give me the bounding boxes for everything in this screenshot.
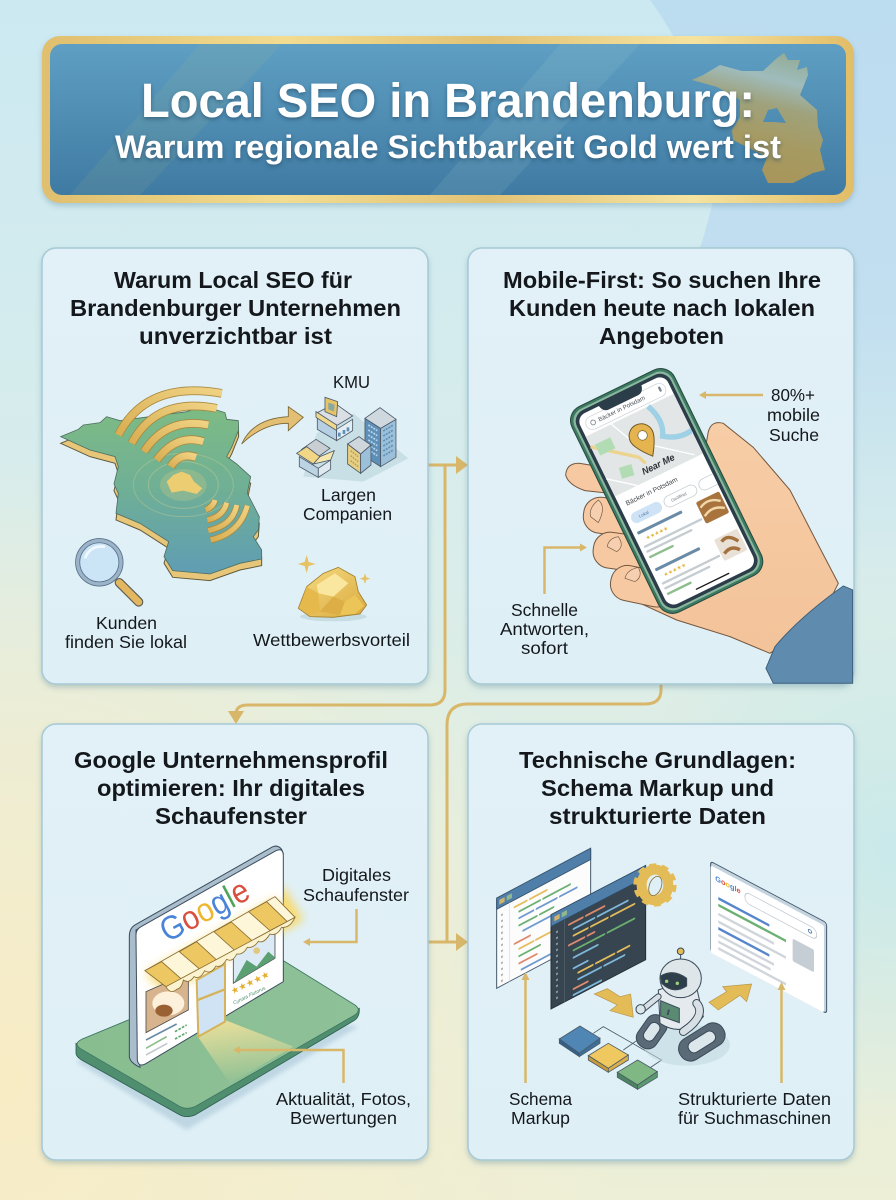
landscape picture	[233, 923, 275, 983]
hand and sleeve	[566, 423, 853, 683]
icon: Brandenburg map with signal waves	[61, 391, 262, 581]
market stall	[297, 439, 334, 477]
dark code window	[551, 865, 646, 1009]
phone	[565, 363, 768, 619]
title text: Warum regionale Sichtbarkeit Gold wert ist	[115, 129, 781, 165]
shop with sign	[316, 397, 353, 441]
robot	[632, 948, 730, 1066]
callout: 80% mobile search: Suche	[769, 425, 819, 445]
callout: digital storefront: Schaufenster	[303, 885, 409, 905]
awning	[145, 897, 295, 992]
filter chips: Geöffnet	[670, 491, 688, 503]
filter chips: Lokal	[638, 510, 650, 519]
heading	[70, 267, 401, 349]
phone screen	[576, 374, 757, 608]
result list 2	[655, 528, 750, 595]
arms	[644, 997, 658, 1008]
results browser	[711, 861, 827, 1014]
icon: Brandenburg map silhouette	[692, 53, 825, 183]
heading: Kunden heute nach lokalen	[509, 295, 815, 321]
icon: magnifying glass	[78, 541, 139, 602]
pin	[625, 420, 662, 462]
star rating: Cynara Flutorus	[232, 985, 267, 1006]
label: Largen Companien: Largen	[321, 485, 376, 505]
green platform	[76, 959, 359, 1117]
panel: Technische Grundlagen	[468, 724, 854, 1160]
map surface	[61, 408, 262, 574]
schema diagram blocks	[559, 1026, 662, 1089]
heading: Warum Local SEO für	[114, 267, 352, 293]
photo	[146, 973, 188, 1033]
sleeve	[766, 586, 853, 683]
illustration: code, robot and search results	[497, 848, 827, 1089]
gold arrows	[594, 984, 752, 1017]
yellow building	[348, 437, 371, 473]
callout: structured data	[678, 982, 831, 1128]
heading: strukturierte Daten	[549, 803, 766, 829]
flow connectors	[228, 456, 661, 951]
signal arcs	[118, 391, 247, 540]
callout: structured data: für Suchmaschinen	[678, 1108, 831, 1128]
finger nails	[590, 500, 640, 582]
callout: currency, photos, reviews: Bewertungen	[290, 1108, 397, 1128]
heading: Angeboten	[599, 323, 724, 349]
callout: 80% mobile search: mobile	[767, 405, 820, 425]
home bar	[695, 572, 730, 590]
plate shadow	[76, 1000, 358, 1130]
results browser: Google	[715, 874, 741, 896]
label: Largen Companien	[303, 485, 392, 524]
label: Kunden finden Sie lokal: Kunden	[96, 613, 157, 633]
palm	[637, 423, 838, 653]
heading: Technische Grundlagen:	[519, 747, 796, 773]
callout: schema markup: Markup	[511, 1108, 570, 1128]
icon: small businesses	[297, 397, 408, 482]
light code window	[497, 848, 591, 988]
antenna	[679, 954, 682, 962]
body	[658, 986, 703, 1029]
door	[197, 964, 225, 1037]
search bar: Bäcker in Potsdam	[597, 395, 646, 423]
callout: fast answers	[500, 544, 589, 658]
heading	[74, 747, 388, 829]
callout: fast answers: sofort	[521, 638, 568, 658]
callout: currency, photos, reviews	[233, 1046, 411, 1128]
heading: Schema Markup und	[541, 775, 774, 801]
robot: /	[667, 1010, 669, 1017]
arrow: panel 2 to panel 4	[428, 684, 661, 951]
Berlin	[133, 453, 233, 517]
panel: Google Unternehmensprofil	[42, 724, 428, 1160]
callout: digital storefront: Digitales	[322, 865, 391, 885]
tracks	[632, 1011, 729, 1065]
map extrusion	[61, 415, 262, 581]
heading	[503, 267, 821, 349]
callout: 80% mobile search: 80%+	[771, 385, 815, 405]
awning glow behind board	[240, 887, 303, 947]
heading: unverzichtbar ist	[139, 323, 332, 349]
heading: Mobile-First: So suchen Ihre	[503, 267, 821, 293]
callout: schema markup	[509, 972, 572, 1128]
banner frame	[42, 36, 854, 203]
gear	[636, 866, 674, 904]
signboard	[129, 846, 283, 1067]
tower	[365, 408, 396, 467]
heading: Brandenburger Unternehmen	[70, 295, 401, 321]
fingers	[566, 463, 677, 610]
title banner	[42, 36, 854, 203]
star rating: ★★★★★	[229, 969, 271, 996]
label: KMU: KMU	[333, 372, 370, 392]
callout: structured data: Strukturierte Daten	[678, 1089, 831, 1109]
Google logo: Google	[154, 872, 256, 950]
label: Largen Companien: Companien	[303, 504, 392, 524]
callout: fast answers: Antworten,	[500, 619, 589, 639]
map	[586, 394, 703, 497]
heading: Schaufenster	[155, 803, 307, 829]
heading: optimieren: Ihr digitales	[97, 775, 365, 801]
label: Wettbewerbsvorteil: Wettbewerbsvorteil	[253, 630, 410, 650]
heading	[519, 747, 796, 829]
callout: fast answers: Schnelle	[511, 600, 578, 620]
filter chips	[629, 474, 718, 525]
heading: Google Unternehmensprofil	[74, 747, 388, 773]
callout: 80% mobile search	[699, 385, 820, 445]
icon: gold nugget	[298, 555, 370, 621]
panel: Warum Local SEO	[42, 248, 428, 684]
callout: schema markup: Schema	[509, 1089, 572, 1109]
head	[660, 959, 701, 998]
illustration: Google storefront	[76, 846, 359, 1130]
title text: Local SEO in Brandenburg:	[141, 75, 755, 128]
panel: Mobile-First	[468, 248, 854, 684]
pin label: Near Me	[640, 452, 677, 478]
result list 1	[636, 491, 732, 559]
callout: currency, photos, reviews: Aktualität, Fotos,	[276, 1089, 411, 1109]
search bar	[583, 381, 668, 432]
text lines on board	[146, 1024, 187, 1055]
result heading: Bäcker in Potsdam	[625, 476, 679, 508]
title text	[115, 75, 781, 165]
banner inner panel	[50, 44, 846, 195]
result list 2: ★★★★★	[663, 562, 687, 579]
result list 1: ★★★★★	[645, 526, 670, 542]
arrow: panel 1 to panel 2 and panel 3	[228, 456, 468, 724]
callout: digital storefront	[303, 865, 409, 946]
notch	[598, 385, 645, 413]
label: Kunden finden Sie lokal	[65, 613, 187, 652]
arrow: map to businesses	[242, 407, 303, 444]
illustration: hand holding phone	[565, 363, 853, 683]
awning glow over board	[145, 898, 295, 995]
sparkles	[298, 555, 370, 584]
label: Kunden finden Sie lokal: finden Sie lokal	[65, 632, 187, 652]
